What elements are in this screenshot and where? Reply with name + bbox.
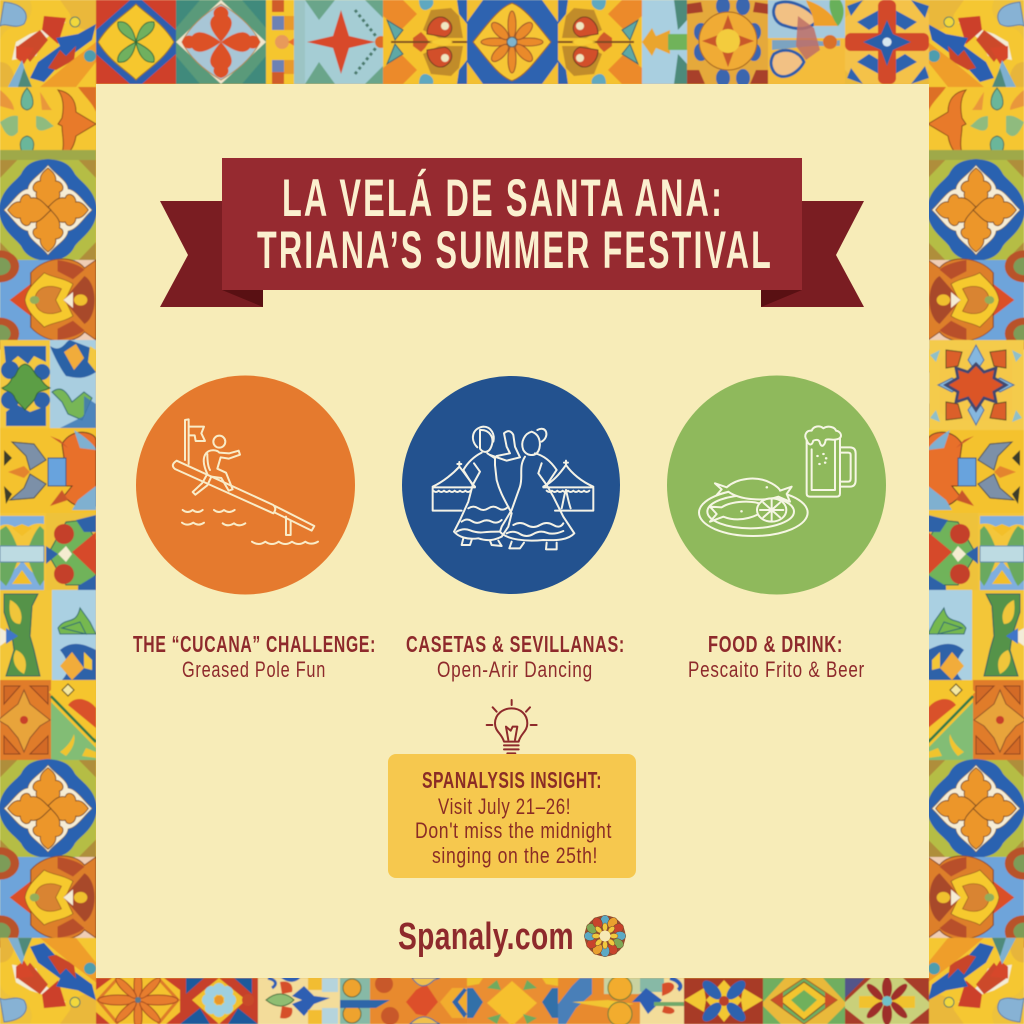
right ribbon tail [761,201,864,307]
cream centre panel [96,84,929,978]
column 2 label: Open-Arir Dancing [437,657,593,682]
column 2 label [406,631,625,682]
column 1 label: THE “CUCANA” CHALLENGE: [133,631,376,657]
insight callout: SPANALYSIS INSIGHT: [422,767,602,793]
orange circle: Cucana greased pole icon [136,376,355,594]
title text: LA VELÁ DE SANTA ANA: [282,168,724,228]
top tile row [96,0,929,87]
insight callout: Don't miss the midnight [415,818,612,843]
insight callout: Visit July 21–26! [438,794,571,819]
icon: light bulb [487,700,537,753]
bottom tile row [96,971,929,1024]
right column red star tile [929,340,1024,430]
column 1 label: Greased Pole Fun [182,657,326,682]
column 1 label [133,631,376,682]
column 3 label: FOOD & DRINK: [708,631,843,657]
title text [257,168,773,280]
green circle: fish plate and beer icon [667,376,886,594]
left ribbon tail [160,201,263,307]
column 3 label [688,631,865,682]
blue circle: dancers and casetas icon [402,376,620,594]
insight callout: singing on the 25th! [432,843,598,868]
title banner [160,158,864,307]
column 3 label: Pescaito Frito & Beer [688,657,865,682]
insight callout [388,754,636,878]
right tile column [927,0,1024,1024]
icon: tile rosette [584,915,626,957]
column 2 label: CASETAS & SEVILLANAS: [406,631,625,657]
website footer: Spanaly.com [398,916,574,958]
left tile column [0,0,97,1024]
